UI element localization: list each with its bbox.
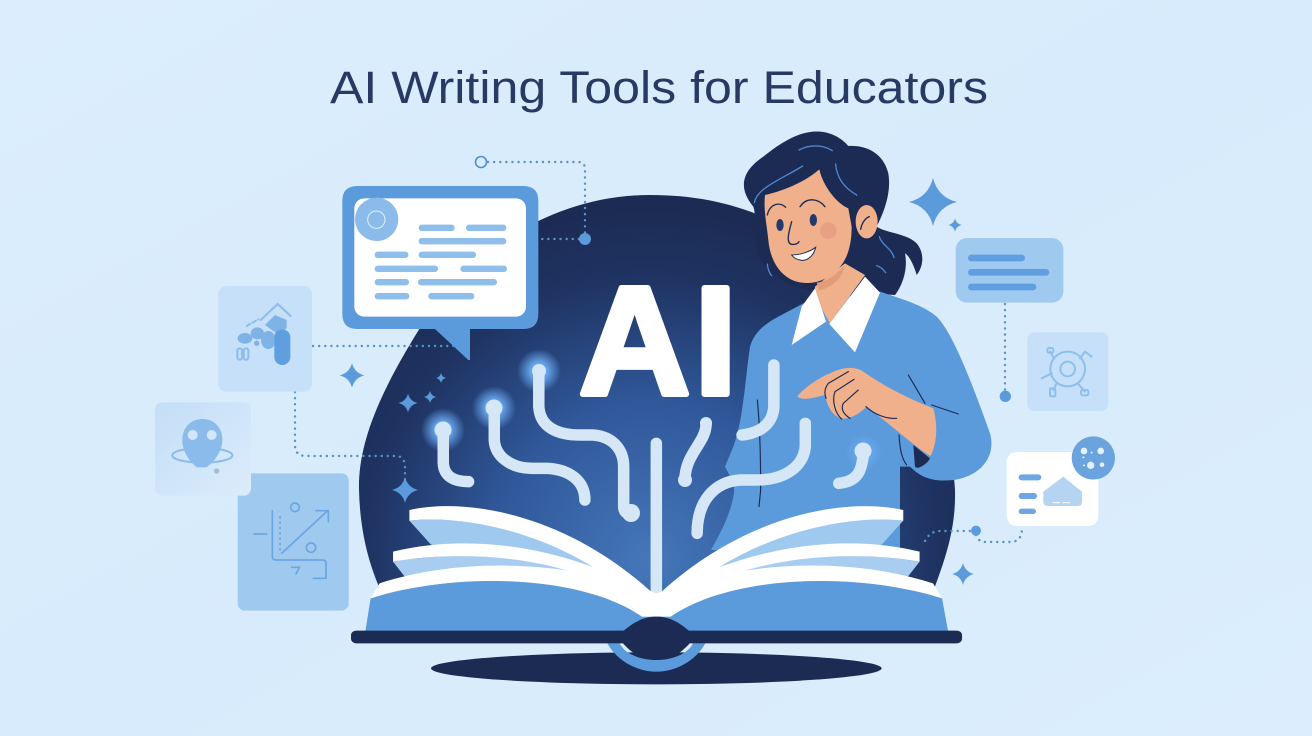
title: AI Writing Tools for Educators: [330, 62, 988, 113]
badge circle: [1072, 436, 1115, 480]
book cover: [365, 581, 948, 632]
spine ring: [607, 643, 705, 672]
left icon cards: [155, 286, 364, 611]
card: chart: [238, 473, 349, 611]
dark orb backdrop: [359, 195, 955, 600]
face: [765, 169, 852, 283]
facial lines: [767, 200, 869, 244]
node glows: [421, 349, 882, 470]
ground shadow: [431, 652, 882, 684]
connector dot: [971, 526, 981, 536]
speech bubble: [342, 186, 538, 360]
neck: [815, 263, 865, 323]
hair highlights: [754, 146, 894, 276]
front pages: [371, 566, 942, 617]
finger and sleeve lines: [757, 372, 958, 507]
cuff interior: [913, 445, 930, 468]
top ring node: [476, 156, 486, 168]
card: text lines: [956, 238, 1063, 303]
dotted connectors: [295, 162, 1022, 546]
sparkles on orb: [392, 373, 446, 503]
neck shadow: [817, 266, 844, 291]
circuit lines and book: [351, 365, 962, 684]
AI lettering: AI: [579, 255, 741, 427]
eyes: [776, 214, 817, 231]
right page stack: [662, 506, 920, 592]
hair: [744, 132, 922, 295]
sweater: [711, 292, 991, 550]
connector dot: bubble: [579, 233, 591, 245]
hand: [797, 368, 936, 456]
teacher figure: [711, 132, 991, 550]
cheek: [820, 222, 837, 239]
sparkle: [340, 363, 364, 388]
trace end nodes: [434, 364, 872, 522]
card: robot face: [155, 402, 251, 496]
right icon cards: [956, 238, 1115, 536]
card: tools: [218, 286, 312, 392]
left page stack: [393, 506, 651, 592]
text lines: [375, 225, 507, 299]
right sparkles: [909, 178, 974, 585]
smile: [792, 247, 816, 260]
connector dot: [1000, 391, 1011, 402]
base bar: [351, 631, 962, 643]
ear: [856, 205, 878, 238]
card: target network: [1027, 332, 1108, 411]
spine clasp: [618, 617, 695, 660]
card: white document: [1007, 452, 1098, 526]
collar: [792, 277, 880, 352]
open book: [351, 506, 962, 684]
circuit traces: [443, 365, 864, 590]
avatar badge: [355, 198, 398, 241]
